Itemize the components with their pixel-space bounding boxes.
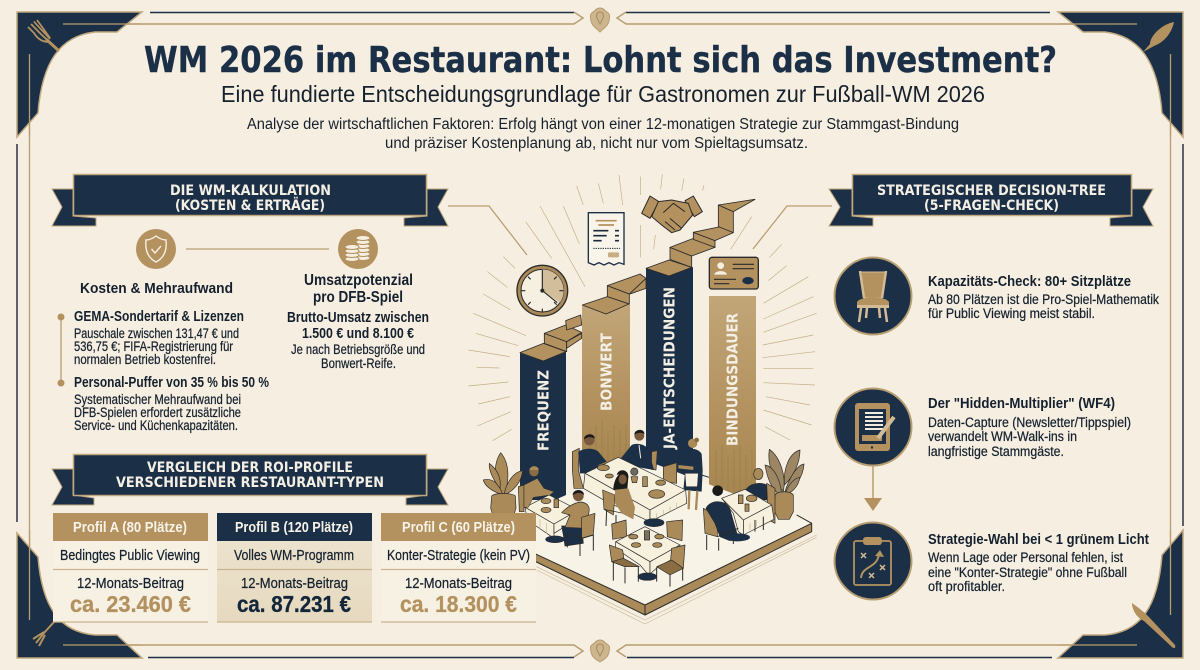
text block: Strategie-Wahl: eine "Konter-Strategie" ohne Fußball — [928, 565, 1127, 580]
banner: ROI-Profile: VERSCHIEDENER RESTAURANT-TYPEN — [116, 475, 384, 491]
profile card B — [217, 513, 372, 622]
text block: Kapazitäts-Check — [928, 274, 1159, 321]
bar: Bonwert — [582, 304, 630, 470]
corner: bottom right with knife — [1058, 530, 1183, 658]
heading: Umsatzpotenzial: pro DFB-Spiel — [313, 289, 403, 306]
staircase with arrow — [520, 199, 755, 361]
man right with chair — [703, 485, 750, 551]
icon: loyalty card — [709, 257, 758, 289]
text block: GEMA — [74, 309, 244, 367]
profile card C — [381, 513, 536, 622]
text block: Personal-Puffer: Service- und Küchenkapazitäten. — [74, 418, 238, 433]
text block: Personal-Puffer: Personal-Puffer von 35 % bis 50 % — [74, 375, 269, 391]
man left in tan — [518, 466, 554, 512]
profile card C: Konter-Strategie (kein PV) — [387, 548, 530, 564]
bar: Frequenz — [520, 352, 566, 500]
bar: Frequenz: FREQUENZ — [534, 370, 552, 451]
emblem: top — [590, 8, 610, 32]
profile card C: Profil C (60 Plätze) — [402, 520, 515, 536]
text block: Brutto-Umsatz — [287, 310, 429, 371]
profile card A: ca. 23.460 € — [70, 591, 191, 617]
plant left — [483, 453, 523, 517]
corner: top left with fork — [17, 12, 142, 137]
profile card B: 12-Monats-Beitrag — [241, 576, 348, 592]
text block: Brutto-Umsatz: Bonwert-Reife. — [321, 356, 396, 371]
text block: Strategie-Wahl — [928, 532, 1149, 594]
intro text: Analyse der wirtschaftlichen Faktoren: Erfolg hängt von einer 12-monatigen Strategie zur Stammgast-Bindung — [247, 116, 959, 133]
woman centre with chair — [603, 470, 635, 526]
text block: GEMA: 536,75 €; FIFA-Registrierung für — [74, 339, 233, 354]
banner: ROI-Profile — [52, 454, 448, 505]
text block: Personal-Puffer: Systematischer Mehraufwand bei — [74, 392, 241, 407]
text block: GEMA: normalen Betrieb kostenfrei. — [74, 352, 216, 367]
icon: handshake — [642, 196, 702, 233]
cost list timeline — [58, 314, 64, 386]
text block: Brutto-Umsatz: Brutto-Umsatz zwischen — [287, 310, 429, 326]
intro text — [247, 116, 959, 152]
banner: Die WM-Kalkulation — [52, 174, 448, 226]
icon: chair — [834, 258, 912, 334]
heading: Umsatzpotenzial — [304, 272, 413, 306]
heading: Kosten und Mehraufwand: Kosten & Mehraufwand — [80, 281, 233, 297]
table front with chairs — [609, 520, 685, 587]
text block: Kapazitäts-Check: Ab 80 Plätzen ist die Pro-Spiel-Mathematik — [928, 292, 1159, 307]
stripes — [590, 420, 752, 500]
text block: Strategie-Wahl: Strategie-Wahl bei < 1 grünem Licht — [928, 532, 1149, 548]
text block: Hidden-Multiplier: langfristige Stammgäste. — [928, 444, 1064, 459]
text block: Hidden-Multiplier: Der "Hidden-Multiplier" (WF4) — [928, 396, 1115, 412]
icon: coins — [338, 229, 378, 269]
man back centre at long table — [620, 430, 657, 470]
plant right — [765, 449, 804, 519]
waitress — [678, 438, 709, 510]
bar: Ja-Entscheidungen: JA-ENTSCHEIDUNGEN — [660, 287, 678, 450]
text block: Strategie-Wahl: Wenn Lage oder Personal fehlen, ist — [928, 550, 1123, 565]
icon: clipboard — [834, 522, 912, 600]
banner: Decision-Tree: STRATEGISCHER DECISION-TREE — [877, 183, 1106, 199]
long table — [583, 457, 687, 527]
text block: Hidden-Multiplier — [928, 396, 1131, 459]
banner: Die WM-Kalkulation: DIE WM-KALKULATION — [170, 183, 331, 199]
text block: GEMA: Pauschale zwischen 131,47 € und — [74, 326, 239, 341]
profile card A — [53, 513, 208, 622]
icon: clock — [517, 265, 568, 316]
corner: top right with knife — [1058, 12, 1183, 137]
text block: Strategie-Wahl: oft profitabler. — [928, 579, 1005, 594]
profile card C: 12-Monats-Beitrag — [405, 576, 512, 592]
title: WM 2026 im Restaurant: Lohnt sich das Investment? — [144, 40, 1057, 81]
text block: Kapazitäts-Check: für Public Viewing meist stabil. — [928, 306, 1095, 321]
profile card A: Bedingtes Public Viewing — [60, 548, 200, 564]
profile card A: 12-Monats-Beitrag — [77, 576, 184, 592]
emblem: bottom — [590, 640, 610, 662]
corner: bottom left with fork — [17, 530, 142, 658]
icon: receipt — [588, 213, 624, 265]
text block: Kapazitäts-Check: Kapazitäts-Check: 80+ Sitzplätze — [928, 274, 1131, 290]
centre illustration: restaurant floor scene — [483, 430, 817, 624]
banner: Decision-Tree — [829, 174, 1153, 226]
table right — [722, 468, 775, 535]
text block: Hidden-Multiplier: verwandelt WM-Walk-ins in — [928, 429, 1077, 444]
floor platform — [483, 460, 817, 624]
banner: Decision-Tree: (5-FRAGEN-CHECK) — [924, 198, 1059, 214]
text block: Brutto-Umsatz: Je nach Betriebsgröße und — [291, 342, 425, 357]
profile card C: ca. 18.300 € — [400, 591, 517, 617]
profile card B: Volles WM-Programm — [234, 548, 354, 564]
bar: Bindungsdauer: BINDUNGSDAUER — [724, 313, 742, 446]
bar: Ja-Entscheidungen — [646, 267, 693, 490]
profile card A: Profil A (80 Plätze) — [73, 520, 187, 536]
bar: Bindungsdauer — [709, 296, 756, 500]
man back left at long table — [572, 434, 607, 488]
bar: Bonwert: BONWERT — [598, 333, 616, 411]
man front left with chair — [562, 490, 595, 556]
connector between icons — [186, 248, 329, 250]
connector: right banner to centre — [753, 206, 832, 249]
intro text: und präziser Kostenplanung ab, nicht nur vom Spieltagsumsatz. — [385, 135, 808, 152]
subtitle: Eine fundierte Entscheidungsgrundlage für Gastronomen zur Fußball-WM 2026 — [221, 81, 985, 107]
icon: tablet — [834, 388, 912, 466]
table left — [525, 495, 578, 543]
arrow: down — [864, 466, 882, 511]
banner: Die WM-Kalkulation: (KOSTEN & ERTRÄGE) — [175, 197, 325, 214]
connector: left banner to centre — [448, 206, 527, 255]
banner: ROI-Profile: VERGLEICH DER ROI-PROFILE — [147, 460, 353, 476]
text block: Personal-Puffer: DFB-Spielen erfordert zusätzliche — [74, 405, 241, 420]
text block: Hidden-Multiplier: Daten-Capture (Newsletter/Tippspiel) — [928, 415, 1131, 430]
icon: shield — [136, 229, 176, 269]
chair by long table — [663, 463, 677, 483]
centre illustration: rising bars — [468, 174, 817, 500]
text block: Personal-Puffer — [74, 375, 269, 433]
text block: Brutto-Umsatz: 1.500 € und 8.100 € — [302, 326, 414, 342]
profile card B: ca. 87.231 € — [237, 591, 351, 617]
heading: Umsatzpotenzial: Umsatzpotenzial — [304, 272, 413, 289]
profile card B: Profil B (120 Plätze) — [235, 520, 353, 536]
text block: GEMA: GEMA-Sondertarif & Lizenzen — [74, 309, 244, 325]
